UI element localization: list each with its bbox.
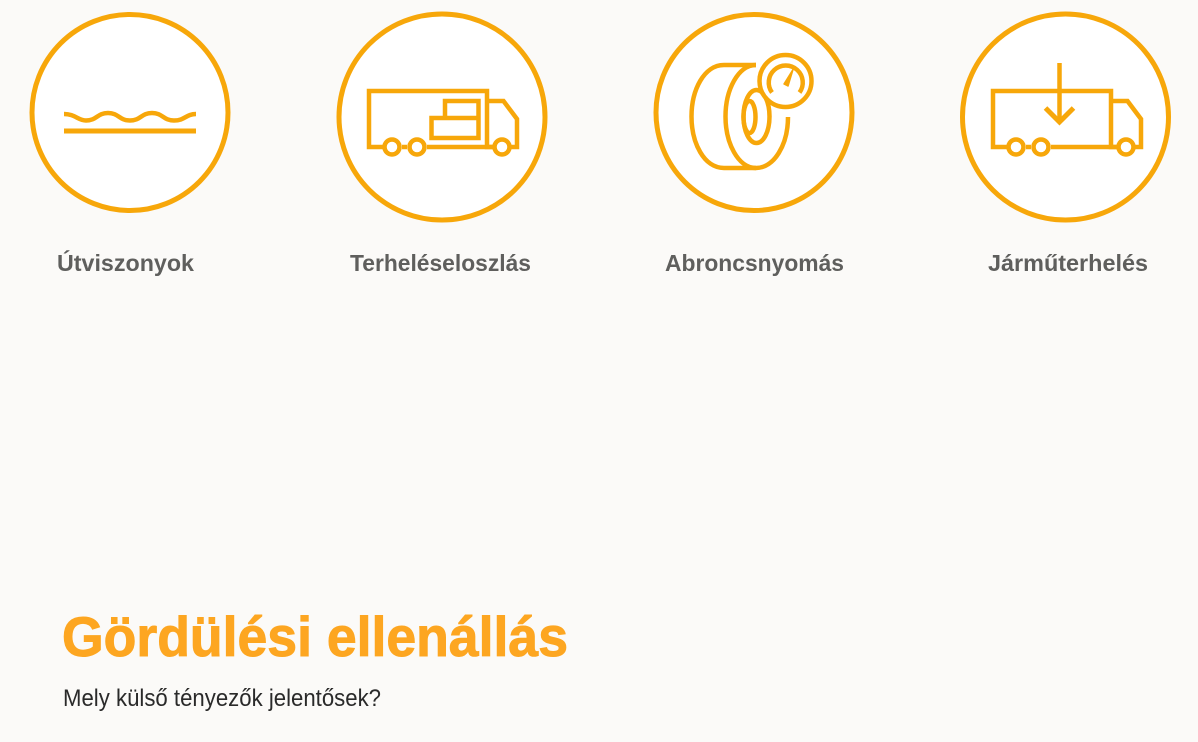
label: tire pressure: Abroncsnyomás [665, 250, 844, 276]
subtitle: Mely külső tényezők jelentősek? [63, 685, 381, 712]
label: vehicle load: Járműterhelés [988, 250, 1148, 276]
icon: vehicle load [962, 14, 1168, 220]
icon: truck with load distribution [339, 14, 545, 220]
label: road conditions: Útviszonyok [57, 249, 194, 276]
title: Gördülési ellenállás [62, 605, 568, 668]
label: load distribution: Terheléseloszlás [350, 250, 531, 276]
icon: road conditions [32, 14, 228, 210]
icon: tire pressure [656, 14, 852, 210]
